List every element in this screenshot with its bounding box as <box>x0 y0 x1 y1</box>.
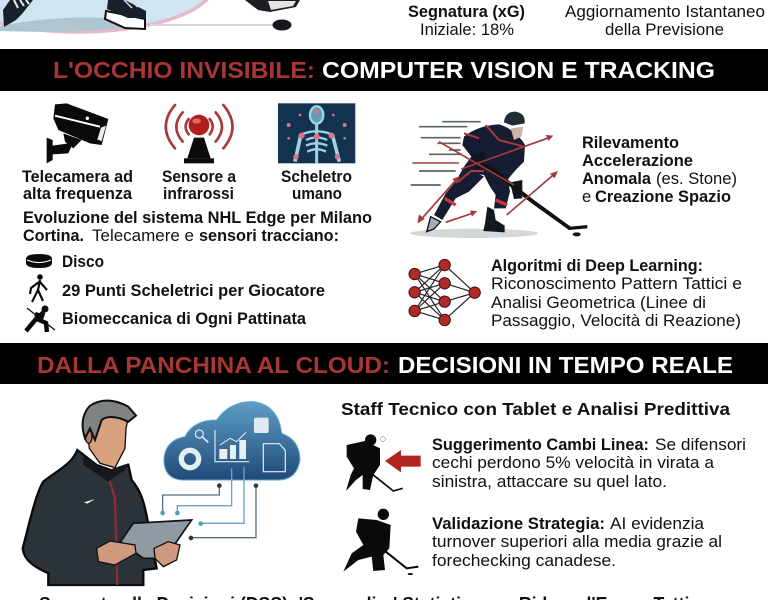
list item: puck: Disco <box>62 253 104 271</box>
text block: anomaly detection <box>582 134 737 206</box>
text block: anomaly detection: (es. Stone) <box>656 170 737 188</box>
section banner: real-time decisions: DALLA PANCHINA AL CLOUD: <box>37 352 390 378</box>
list item: skeletal points <box>30 274 325 302</box>
icon: neural network <box>409 259 480 326</box>
text block: NHL Edge evolution: Telecamere e <box>92 227 194 245</box>
section banner: computer vision: L'OCCHIO INVISIBILE: <box>53 57 315 83</box>
top illustration: rink with skates and puck <box>0 0 300 32</box>
text block: NHL Edge evolution: Cortina. <box>23 227 84 245</box>
top stat: initial expected goals: Segnatura (xG) <box>408 3 525 21</box>
text block: strategy validation: forechecking canadese. <box>432 552 616 570</box>
text block: strategy validation: AI evidenzia <box>610 515 705 533</box>
top stat: initial expected goals <box>408 3 525 39</box>
top stat: initial expected goals: Iniziale: 18% <box>420 21 514 39</box>
list item: biomechanics: Biomeccanica di Ogni Pattinata <box>62 310 307 328</box>
label: skeleton: Scheletro <box>281 168 352 186</box>
text block: line change suggestion: Suggerimento Cambi Linea: <box>432 436 649 454</box>
text block: strategy validation <box>432 515 722 570</box>
text block: anomaly detection: Anomala <box>582 170 652 188</box>
top stat: instant update: Aggiornamento Istantaneo <box>565 3 765 21</box>
text block: deep learning: Riconoscimento Pattern Tattici e <box>491 275 742 293</box>
illustration: skating hockey player with motion arrows <box>410 112 587 238</box>
label: skeleton: umano <box>292 185 342 203</box>
label: camera <box>22 168 133 203</box>
icon: infrared sensor <box>166 105 232 163</box>
icon: player silhouette with red arrow <box>346 434 421 491</box>
text block: NHL Edge evolution: Evoluzione del sistema NHL Edge per Milano <box>23 209 372 227</box>
heading: staff with tablet: Staff Tecnico con Tablet e Analisi Predittiva <box>341 399 730 419</box>
section banner: real-time decisions <box>0 343 768 384</box>
top stat: instant update: della Previsione <box>605 21 724 39</box>
text block: anomaly detection: Accelerazione <box>582 152 693 170</box>
text block: anomaly detection: Creazione Spazio <box>595 188 731 206</box>
list item: skeletal points: 29 Punti Scheletrici per Giocatore <box>62 282 325 300</box>
text block: NHL Edge evolution <box>23 209 372 245</box>
text block: line change suggestion: sinistra, attaccare su quel lato. <box>432 473 667 491</box>
text block: line change suggestion <box>432 436 746 491</box>
illustration: data cloud with connectors <box>160 402 300 540</box>
text block: strategy validation: Validazione Strategia: <box>432 515 605 533</box>
illustration: coach with tablet <box>23 401 192 585</box>
text block: anomaly detection: e <box>582 188 591 206</box>
icon: player silhouette with stick <box>343 509 418 575</box>
top stat: instant update <box>565 3 765 39</box>
label: sensor <box>162 168 237 203</box>
label: skeleton <box>281 168 352 203</box>
section banner: computer vision <box>0 49 768 91</box>
label: sensor: Sensore a <box>162 168 237 186</box>
text block: deep learning: Algoritmi di Deep Learning: <box>491 257 703 275</box>
icon: human skeleton image <box>278 103 355 163</box>
list item: biomechanics <box>26 306 307 332</box>
section banner: real-time decisions: DECISIONI IN TEMPO REALE <box>398 352 733 378</box>
text block: NHL Edge evolution: sensori tracciano: <box>199 227 339 245</box>
label: camera: alta frequenza <box>23 185 133 203</box>
label: sensor: infrarossi <box>163 185 234 203</box>
text block: strategy validation: turnover superiori alla media grazie al <box>432 533 722 551</box>
text block: deep learning <box>491 257 742 330</box>
icon: security camera <box>47 103 108 163</box>
text block: line change suggestion: Se difensori <box>655 436 746 454</box>
list item: puck <box>26 253 104 271</box>
text block: anomaly detection: Rilevamento <box>582 134 679 152</box>
section banner: computer vision: COMPUTER VISION E TRACKING <box>322 57 715 83</box>
text block: line change suggestion: cechi perdono 5% velocità in virata a <box>432 454 715 472</box>
text block: deep learning: Analisi Geometrica (Linee di <box>491 294 706 312</box>
label: camera: Telecamera ad <box>22 168 133 186</box>
text block: deep learning: Passaggio, Velocità di Reazione) <box>491 312 741 330</box>
